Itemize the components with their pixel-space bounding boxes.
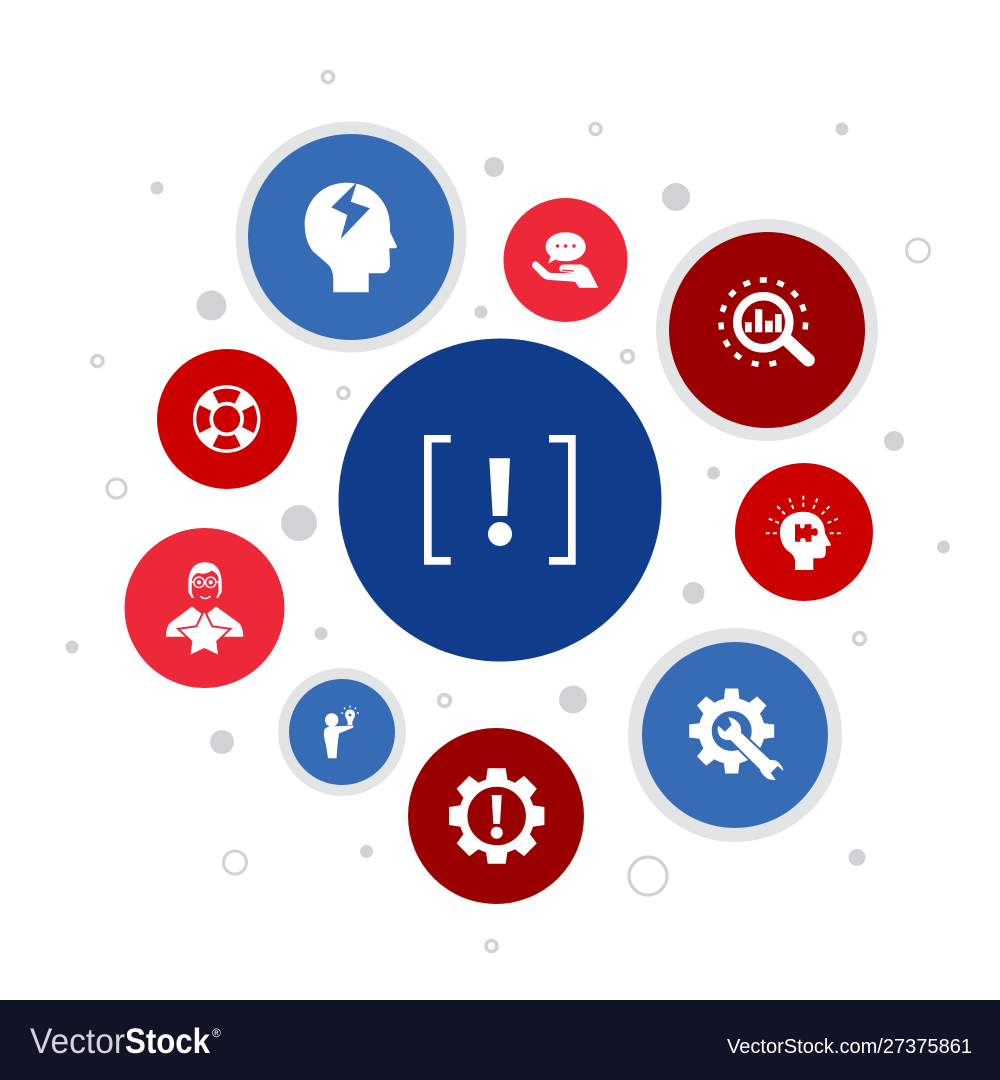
logo: VectorStock: Vector (30, 1022, 125, 1061)
bubble: head with lightning bolt (236, 122, 466, 352)
bubble: speech and hand (504, 198, 628, 322)
icon: magnifying glass over bar chart (718, 277, 808, 367)
bubble: lifebuoy (157, 349, 297, 489)
icon: man with glasses holding a star (166, 562, 243, 654)
logo: VectorStock: ® (212, 1026, 221, 1040)
bubble: magnifier with chart (656, 219, 878, 441)
bubble: person with star (124, 528, 284, 688)
bubble: head with puzzle piece (735, 463, 873, 601)
icon: head with lightning bolt (305, 182, 397, 292)
icon: lifebuoy (193, 385, 260, 453)
central circle with bracketed exclamation (338, 338, 662, 662)
filled grey dots (66, 122, 950, 866)
icon: speech bubble over open hand (532, 232, 598, 288)
icon: gear and wrench (689, 688, 783, 780)
bubble: gear with wrench (628, 628, 842, 842)
logo: VectorStock: Stock (125, 1022, 210, 1061)
footer banner (0, 1000, 1000, 1080)
icon: head with puzzle piece and rays (766, 496, 841, 570)
icon: gear with exclamation mark (449, 768, 544, 864)
icon: brackets and exclamation mark (424, 435, 576, 565)
bubble: gear with exclamation (408, 728, 584, 904)
image id text: VectorStock.com/27375861 (727, 1036, 972, 1058)
icon: person holding a light bulb (324, 706, 359, 758)
hollow grey rings (92, 72, 930, 952)
logo: VectorStock (30, 1022, 221, 1061)
bubble: person with idea (278, 668, 406, 796)
